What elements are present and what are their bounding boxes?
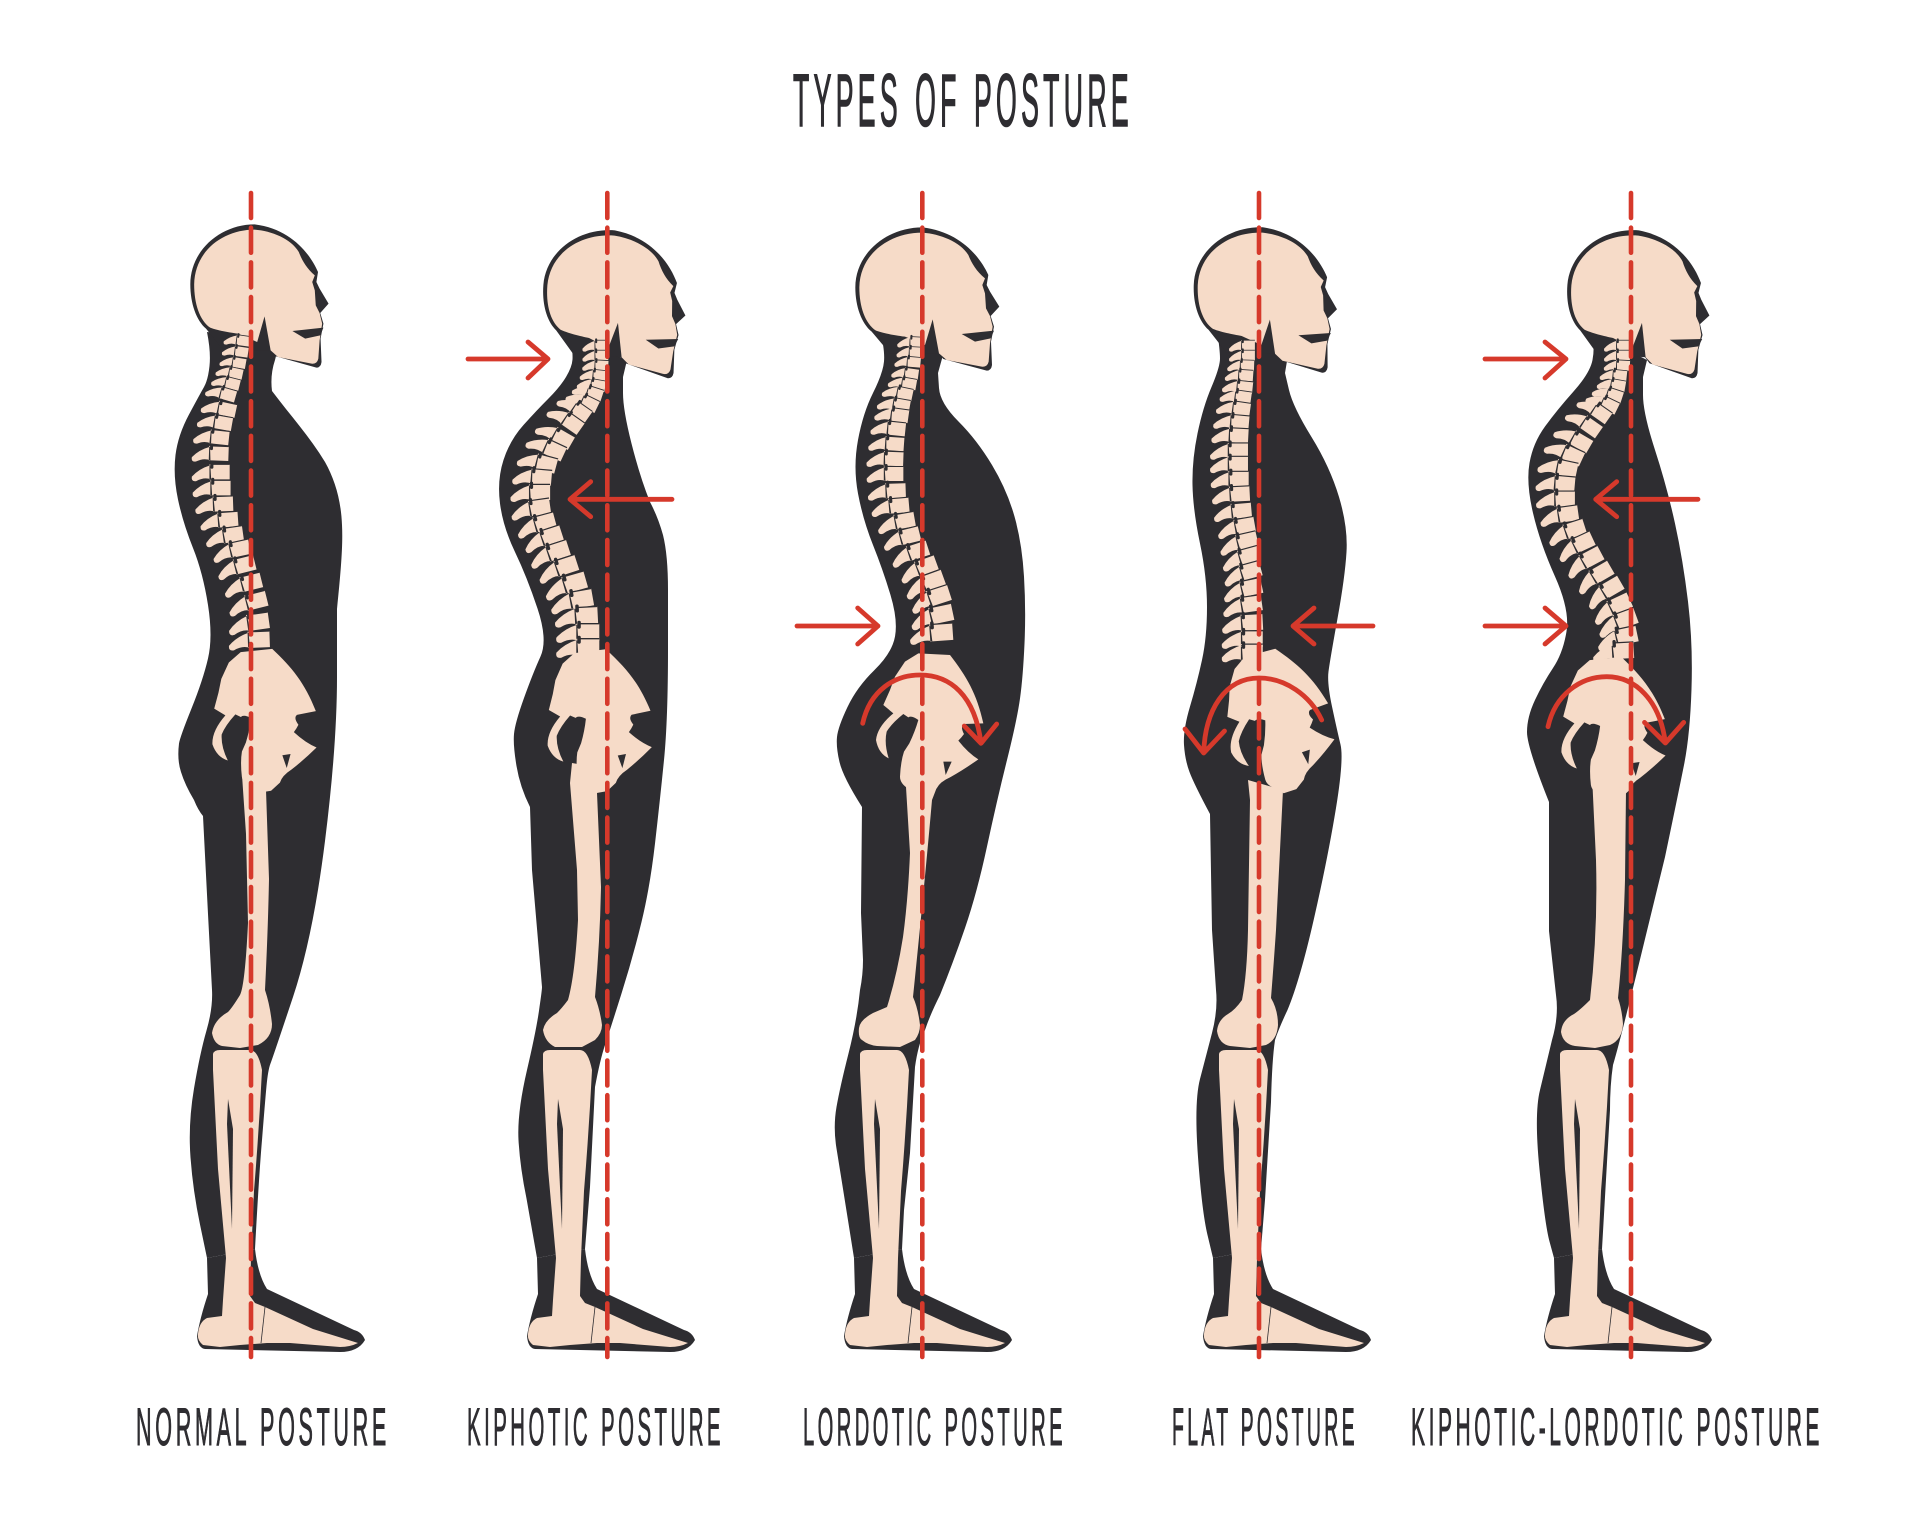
arrow: lumbar: [797, 608, 878, 644]
text: TYPES OF POSTURE: [793, 59, 1133, 142]
pelvis: [1548, 650, 1676, 807]
arrow: upper back: [1485, 342, 1566, 378]
plumb line: [1257, 193, 1261, 1357]
arrow: thoracic: [1596, 482, 1698, 517]
spine: [866, 334, 955, 645]
plumb line: [1629, 193, 1633, 1357]
lower leg and foot: [527, 1050, 695, 1352]
body silhouette: [1184, 330, 1347, 1258]
femur: [543, 763, 612, 1047]
figure: flat posture: [1184, 193, 1373, 1357]
head: [190, 224, 329, 368]
text: KIPHOTIC POSTURE: [467, 1398, 724, 1457]
body silhouette: [175, 332, 342, 1258]
spine: [1210, 338, 1264, 662]
pelvis: [533, 642, 663, 800]
femur: [859, 787, 937, 1047]
femur: [212, 775, 272, 1048]
head: [1191, 225, 1340, 373]
pelvis: [1204, 637, 1350, 805]
femur: [1561, 775, 1626, 1048]
arrow: lumbar: [1485, 608, 1566, 644]
plumb line: [920, 193, 925, 1357]
lower leg and foot: [197, 1050, 365, 1352]
head: [1561, 225, 1716, 379]
head: [855, 227, 999, 371]
arrow: pelvic tilt arc: [863, 675, 997, 743]
lower leg and foot: [1544, 1050, 1712, 1352]
body silhouette: [1527, 332, 1692, 1258]
head: [537, 225, 692, 379]
body silhouette: [835, 330, 1025, 1258]
text: LORDOTIC POSTURE: [803, 1398, 1066, 1457]
arrow: pelvic tilt arc: [1185, 678, 1322, 753]
text: NORMAL POSTURE: [136, 1398, 390, 1457]
lower leg and foot: [844, 1050, 1012, 1352]
text: FLAT POSTURE: [1172, 1398, 1358, 1457]
figure: kiphotic-lordotic posture: [1485, 193, 1716, 1357]
arrow: abdomen: [1293, 608, 1373, 644]
figure: lordotic posture: [797, 193, 1025, 1357]
pelvis: [876, 653, 983, 795]
pelvis: [199, 642, 327, 799]
plumb line: [605, 193, 610, 1357]
arrow: upper back: [468, 342, 548, 378]
lower leg and foot: [1203, 1050, 1371, 1352]
plumb line: [249, 193, 253, 1357]
spine: [192, 331, 270, 651]
spine: [1535, 338, 1639, 662]
figure: normal posture: [175, 193, 365, 1357]
spine: [509, 338, 609, 658]
arrow: thoracic: [570, 482, 672, 517]
arrow: pelvic tilt arc: [1548, 677, 1684, 743]
femur: [1217, 780, 1283, 1048]
figure: kiphotic posture: [468, 193, 695, 1357]
body silhouette: [499, 335, 668, 1258]
